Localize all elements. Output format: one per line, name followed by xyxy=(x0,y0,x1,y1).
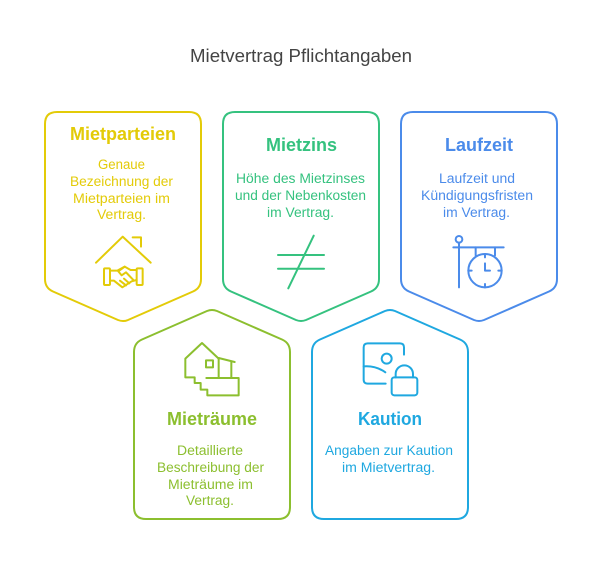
text: Mietparteien description xyxy=(70,157,174,222)
text: Mieträume description: Mieträume im xyxy=(168,477,253,492)
text: Mietzins description xyxy=(235,171,366,220)
icon: house with handshake xyxy=(96,237,151,287)
text: Laufzeit description: Laufzeit und xyxy=(439,171,515,186)
text: Mietparteien description: Bezeichnung der xyxy=(70,174,174,189)
heading: Mietzins: Mietzins xyxy=(266,134,337,155)
icon: house on terrace xyxy=(185,343,239,395)
text: Laufzeit description: im Vertrag. xyxy=(443,205,510,220)
icon: hanging clock xyxy=(453,236,504,287)
icon: picture with padlock xyxy=(364,343,417,395)
text: Mietparteien description: Vertrag. xyxy=(97,207,146,222)
text: Mieträume description xyxy=(157,443,265,508)
panel: Mietparteien xyxy=(45,112,201,321)
text: Mietzins description: Höhe des Mietzinses xyxy=(236,171,365,186)
text: Mieträume description: Vertrag. xyxy=(186,493,234,508)
text: Mieträume description: Detaillierte xyxy=(177,443,243,458)
icon: not equal sign xyxy=(278,236,324,288)
text: Laufzeit description: Kündigungsfristen xyxy=(421,188,533,203)
text: Mieträume description: Beschreibung der xyxy=(157,460,265,475)
heading: Laufzeit: Laufzeit xyxy=(445,134,513,155)
text: Mietparteien description: Genaue xyxy=(98,157,145,172)
text: Kaution description: Angaben zur Kaution xyxy=(325,443,453,458)
text: Mietparteien description: Mietparteien im xyxy=(73,191,170,206)
heading: Mieträume: Mieträume xyxy=(167,408,257,429)
text: Kaution description: im Mietvertrag. xyxy=(342,460,435,475)
panel: Laufzeit xyxy=(401,112,557,321)
text: Kaution description xyxy=(325,443,453,475)
panel: Kaution xyxy=(312,310,468,519)
text: Laufzeit description xyxy=(421,171,533,220)
panel: Mietzins xyxy=(223,112,379,321)
title: Mietvertrag Pflichtangaben xyxy=(190,45,412,66)
panel: Mieträume xyxy=(134,310,290,519)
heading: Kaution: Kaution xyxy=(358,408,422,429)
text: Mietzins description: und der Nebenkosten xyxy=(235,188,366,203)
heading: Mietparteien: Mietparteien xyxy=(70,123,176,144)
text: Mietzins description: im Vertrag. xyxy=(267,205,334,220)
